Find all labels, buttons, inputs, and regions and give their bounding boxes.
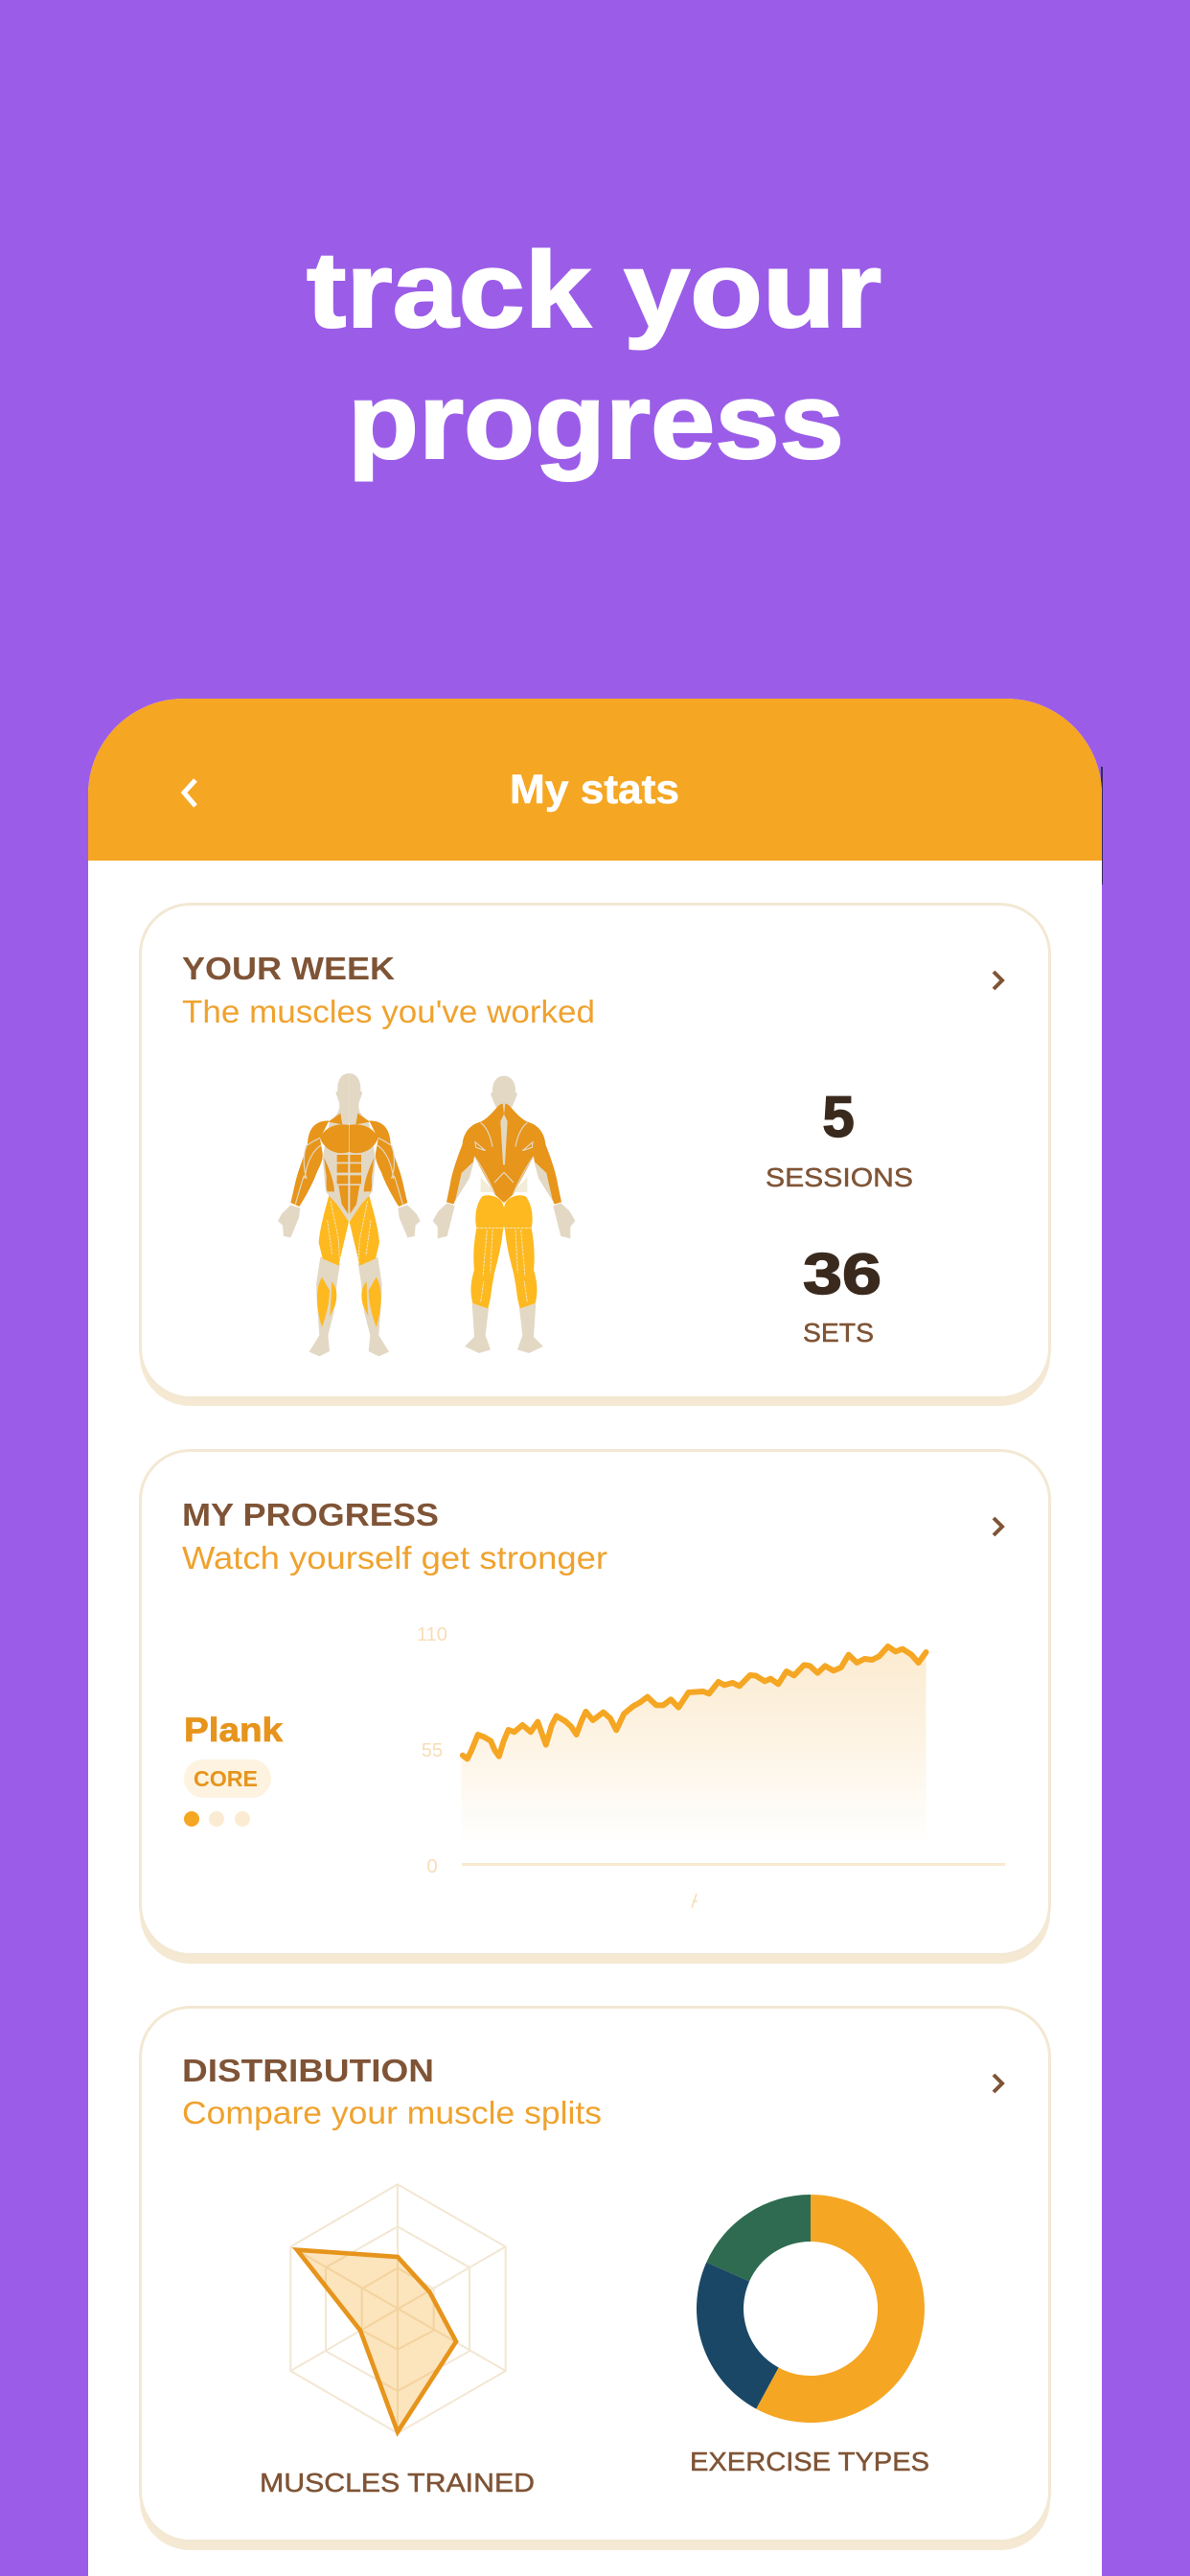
heading: my progress: MY PROGRESS bbox=[182, 1497, 439, 1532]
title: progress bbox=[348, 361, 844, 481]
exercise name: Plank bbox=[184, 1712, 284, 1749]
icon: chevron bbox=[994, 972, 1002, 989]
stat: sessions: 5 bbox=[822, 1085, 855, 1149]
y axis labels: 110 bbox=[417, 1624, 447, 1645]
title bbox=[307, 230, 881, 481]
stat: sessions: SESSIONS bbox=[766, 1162, 913, 1192]
subtitle: your week: The muscles you've worked bbox=[182, 994, 595, 1029]
icon: front muscle figure bbox=[278, 1073, 421, 1356]
area fill bbox=[462, 1646, 927, 1843]
donut chart bbox=[697, 2195, 925, 2423]
phone screen panel bbox=[88, 699, 1102, 2576]
carousel dots bbox=[184, 1811, 250, 1827]
donut label: EXERCISE TYPES bbox=[690, 2447, 929, 2476]
x axis bbox=[462, 1863, 1005, 1866]
icon: chevron bbox=[994, 1518, 1002, 1535]
panel: distribution bbox=[140, 2007, 1050, 2550]
panel: your week bbox=[140, 905, 1050, 1406]
stat: sets: 36 bbox=[803, 1242, 881, 1306]
line chart bbox=[417, 1624, 1005, 1908]
subtitle: my progress: Watch yourself get stronger bbox=[182, 1540, 607, 1576]
screen header bar bbox=[88, 699, 1102, 861]
icon: back muscle figure bbox=[433, 1076, 575, 1353]
stat: sets bbox=[803, 1242, 881, 1347]
heading: distribution: DISTRIBUTION bbox=[182, 2053, 434, 2088]
y axis labels bbox=[417, 1624, 447, 1877]
radar grid bbox=[290, 2184, 506, 2433]
stat: sessions bbox=[766, 1085, 913, 1192]
radar label: MUSCLES TRAINED bbox=[260, 2468, 535, 2497]
tag: core: CORE bbox=[194, 1766, 258, 1791]
header title: My stats bbox=[510, 767, 679, 813]
title: track your bbox=[307, 230, 881, 350]
heading: your week: YOUR WEEK bbox=[182, 951, 395, 986]
tag: core bbox=[184, 1760, 271, 1798]
icon: back chevron bbox=[184, 780, 195, 806]
icon: chevron bbox=[994, 2075, 1002, 2092]
subtitle: distribution: Compare your muscle splits bbox=[182, 2095, 602, 2130]
data line bbox=[463, 1646, 927, 1759]
y axis labels: 55 bbox=[422, 1740, 443, 1761]
panel: my progress bbox=[140, 1451, 1050, 1964]
x axis tick fragment bbox=[692, 1894, 698, 1908]
stat: sets: SETS bbox=[803, 1318, 874, 1347]
radar data polygon bbox=[297, 2250, 456, 2432]
y axis labels: 0 bbox=[426, 1856, 438, 1877]
radar chart bbox=[290, 2184, 506, 2433]
